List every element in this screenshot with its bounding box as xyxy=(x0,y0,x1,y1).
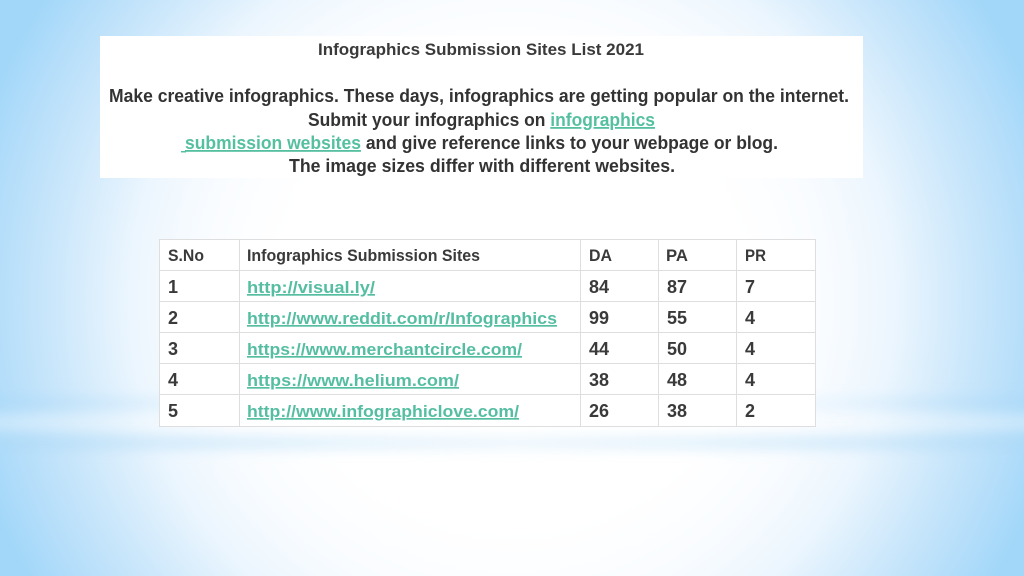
row 4: 4 xyxy=(745,370,755,390)
row 5 xyxy=(168,401,755,421)
table header: PR xyxy=(745,246,766,265)
row 3: https://www.merchantcircle.com/ xyxy=(247,340,522,359)
intro line 4: The image sizes differ with different websites. xyxy=(289,156,675,176)
row 4: 48 xyxy=(667,370,687,390)
row 4: https://www.helium.com/ xyxy=(247,371,459,390)
row 5: 5 xyxy=(168,401,178,421)
row 2: 99 xyxy=(589,308,609,328)
row 5: 26 xyxy=(589,401,609,421)
row 3 xyxy=(168,339,755,359)
heading: Infographics Submission Sites List 2021 xyxy=(318,40,644,59)
table header: PA xyxy=(666,246,688,265)
row 5: 38 xyxy=(667,401,687,421)
row 2: http://www.reddit.com/r/Infographics xyxy=(247,309,557,328)
table xyxy=(159,239,816,426)
row 1: 87 xyxy=(667,277,687,297)
row 2: 2 xyxy=(168,308,178,328)
row 1: 7 xyxy=(745,277,755,297)
row 5: 2 xyxy=(745,401,755,421)
row 5: http://www.infographiclove.com/ xyxy=(247,402,519,421)
row 4 xyxy=(168,370,755,390)
row 3: 44 xyxy=(589,339,609,359)
panel: intro text xyxy=(100,36,863,178)
intro line 2: Submit your infographics on infographics xyxy=(308,110,655,130)
table header: Infographics Submission Sites xyxy=(247,246,480,265)
row 1: http://visual.ly/ xyxy=(247,278,375,297)
table header: S.No xyxy=(168,246,204,265)
row 2: 4 xyxy=(745,308,755,328)
intro line 3: submission websites and give reference links to your webpage or blog. xyxy=(185,133,778,153)
row 1: 84 xyxy=(589,277,609,297)
table header xyxy=(168,246,766,265)
row 1 xyxy=(168,277,755,297)
table header: DA xyxy=(589,246,612,265)
link underline stub xyxy=(181,151,186,152)
row 2 xyxy=(168,308,755,328)
intro line 1: Make creative infographics. These days, infographics are getting popular on the internet. xyxy=(109,86,849,106)
row 4: 38 xyxy=(589,370,609,390)
row 3: 3 xyxy=(168,339,178,359)
row 2: 55 xyxy=(667,308,687,328)
row 3: 4 xyxy=(745,339,755,359)
row 3: 50 xyxy=(667,339,687,359)
row 4: 4 xyxy=(168,370,178,390)
row 1: 1 xyxy=(168,277,178,297)
